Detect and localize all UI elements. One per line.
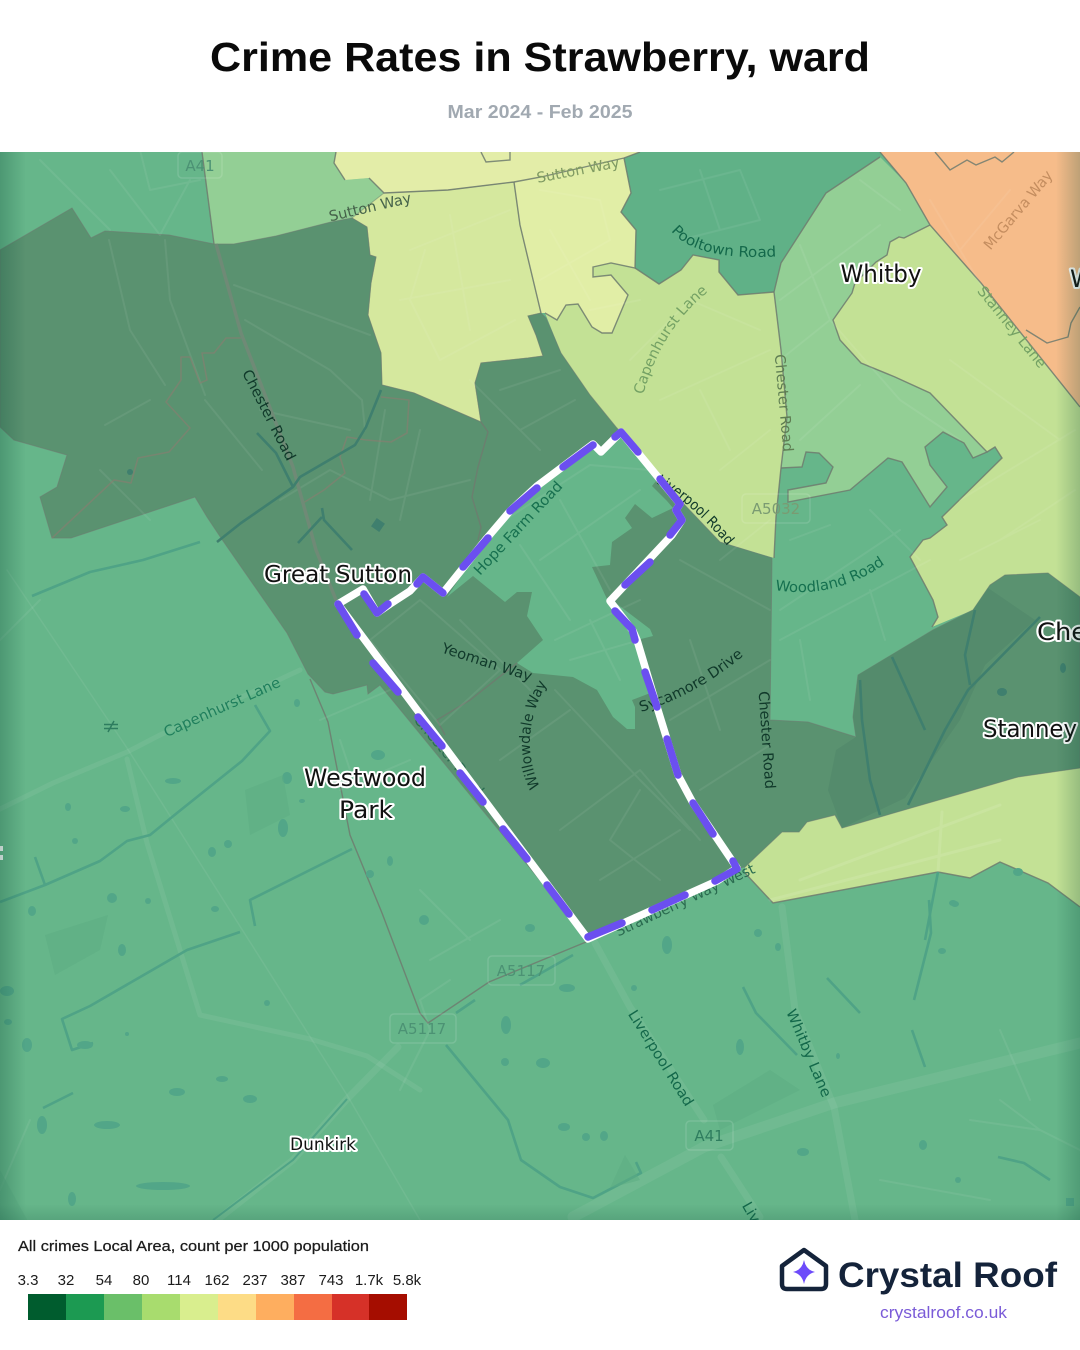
road shield: A41 north: [178, 152, 222, 178]
legend colour bar: [28, 1294, 407, 1320]
subtitle: date range: Mar 2024 - Feb 2025: [448, 102, 632, 122]
road shield: A41 south: [686, 1121, 733, 1150]
legend scale values: 387: [280, 1272, 306, 1289]
map base area: [0, 152, 1080, 1220]
map edge vignette: [0, 152, 1080, 1220]
legend scale values: 54: [96, 1272, 112, 1289]
road shield: A5032: A5032: [752, 500, 800, 518]
area: north-west light green: [202, 152, 384, 244]
place labels: Stanney: [983, 715, 1077, 743]
waterways in dark area: [217, 390, 1040, 815]
road network: [0, 150, 1080, 1220]
area: north pale yellow: [334, 152, 640, 193]
boundary lines: [202, 152, 1080, 1023]
area: darker east tile: [841, 588, 988, 828]
Chester Road corridor: [216, 244, 336, 600]
road shield: A5117 east: A5117: [497, 962, 545, 980]
road labels: Capenhurst Lane: [634, 287, 707, 393]
area: light green inlet in ward: [447, 432, 673, 729]
ward dashes purple: [338, 432, 737, 937]
area: Whitby light green: [774, 157, 987, 507]
road labels: Whitby Lane: [782, 1007, 834, 1100]
ward boundary: Strawberry: [338, 432, 737, 939]
road labels: Hope Farm Road: [471, 479, 566, 579]
brand logo: Crystal Roof: [782, 1250, 1057, 1322]
area: Pooltown green: [621, 152, 885, 295]
legend scale values: 32: [58, 1272, 74, 1289]
road labels: Sycamore Drive: [639, 651, 742, 712]
legend scale values: 80: [133, 1272, 149, 1289]
area: dark green low crime block: [0, 208, 1080, 939]
dark area footpaths: [52, 338, 409, 538]
road labels: Pooltown Road: [672, 224, 775, 258]
road shield: A5117 west: [390, 1014, 456, 1043]
area: Sutton yellow green: [352, 182, 543, 422]
road shield: A5032: [742, 494, 810, 523]
road shield: A41 north: A41: [185, 157, 215, 175]
road labels: Stanney Lane: [974, 284, 1049, 372]
road labels: Chester Road: [771, 354, 795, 453]
legend scale values: [18, 1272, 422, 1289]
legend scale values: 3.3: [18, 1272, 38, 1289]
icon: house with star: [782, 1250, 826, 1289]
road labels: [164, 159, 1052, 1272]
land-use patches: [2, 1176, 640, 1186]
road labels: Chester Road: [410, 712, 487, 799]
icon: railway station: [104, 721, 118, 732]
road labels: McGarva Way: [981, 168, 1057, 253]
area: north pale block: [514, 158, 636, 333]
brand name: Crystal Roof: [838, 1256, 1057, 1295]
road labels: Strawberry Way West: [613, 861, 758, 940]
place labels: Dunkirk: [290, 1135, 356, 1155]
ward outline white: [338, 432, 737, 939]
legend scale values: 5.8k: [393, 1272, 422, 1289]
road labels: Sutton Way: [328, 191, 413, 225]
place labels: Great Sutton: [264, 562, 412, 588]
brand url: crystalroof.co.uk: [880, 1304, 1008, 1322]
place labels: Westwood: [304, 764, 426, 792]
legend scale values: 162: [204, 1272, 230, 1289]
road labels: Chester Road: [755, 691, 777, 790]
legend title: All crimes Local Area, count per 1000 population: [18, 1238, 369, 1255]
legend scale values: 237: [242, 1272, 268, 1289]
legend scale values: 743: [318, 1272, 344, 1289]
road labels: Liverpool Road: [738, 1200, 807, 1303]
road labels: Yeoman Way: [439, 641, 534, 685]
area: Capenhurst yellow green: [545, 255, 787, 558]
road labels: Sutton Way: [535, 155, 621, 187]
road shield: A41 south: A41: [694, 1127, 724, 1145]
road labels: Liverpool Road: [657, 474, 735, 545]
map label fragment at left edge: [0, 846, 3, 860]
area: south yellow green strip: [745, 768, 1080, 907]
area: east yellow green: [833, 225, 1080, 627]
ponds: [0, 469, 1074, 1206]
area: orange high crime: [880, 152, 1080, 407]
road shield: A5117 east: [488, 956, 555, 985]
road labels: Capenhurst Lane: [162, 675, 283, 741]
legend: [18, 1238, 422, 1320]
waterways: [0, 542, 1050, 1220]
legend scale values: 1.7k: [355, 1272, 384, 1289]
legend scale values: 114: [167, 1272, 191, 1289]
road shield: A5117 west: A5117: [398, 1020, 446, 1038]
place labels: Whitby: [840, 260, 922, 288]
place labels: [264, 260, 1080, 1155]
road labels: Willowdale Way: [518, 680, 547, 790]
place labels: Park: [339, 796, 393, 824]
road labels: Chester Road: [238, 367, 298, 464]
title: Crime Rates in Strawberry, ward: [210, 34, 870, 80]
road labels: Liverpool Road: [624, 1008, 696, 1109]
road labels: Woodland Road: [776, 556, 884, 592]
